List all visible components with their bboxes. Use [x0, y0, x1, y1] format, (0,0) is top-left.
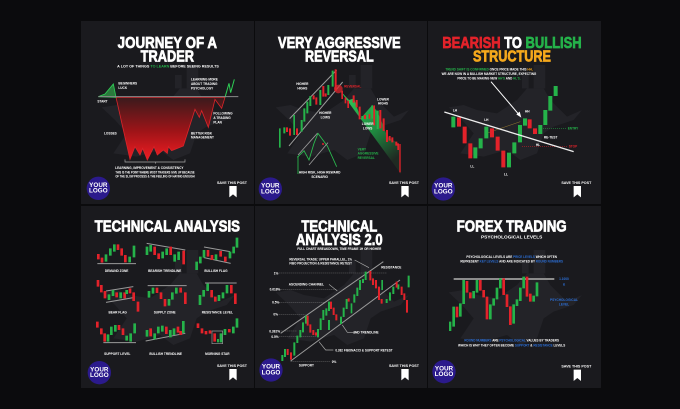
- labels: HIGH RISK, HIGH REWARD: [299, 171, 341, 175]
- logo: YOUR: [434, 183, 453, 190]
- description bottom: WHICH IS WHY THEY OFTEN BECOME SUPPORT & RESISTANCE LEVELS: [458, 343, 565, 347]
- logo: YOUR: [261, 183, 280, 190]
- caption: LEARNING, IMPROVEMENT & CONSISTENCY: [115, 166, 184, 170]
- logo: [88, 361, 111, 384]
- labels: HH: [525, 109, 530, 113]
- labels: SUPPORT: [299, 363, 314, 367]
- candles ascent: [279, 69, 337, 148]
- red candles: [457, 117, 537, 167]
- red candles: [287, 271, 408, 360]
- labels: HIGHS: [297, 86, 307, 90]
- pattern: support level: [96, 322, 136, 356]
- pattern: bullish trendline: [146, 321, 185, 356]
- panel: bearish to bullish structure: [428, 21, 601, 204]
- trendline: [444, 112, 574, 152]
- mini trade diagram: [297, 133, 337, 174]
- pattern: bear flag: BEAR FLAG: [108, 311, 127, 315]
- labels: HIGHER: [319, 111, 332, 115]
- arrow: [491, 82, 521, 118]
- labels: 0.382%: [269, 329, 280, 333]
- subtitle: FULL CHART BREAKDOWN, TIME FRAME 1H OR HIGHER: [297, 247, 382, 251]
- save this post: SAVE THIS POST: [561, 364, 592, 368]
- panel: technical analysis 2.0: [255, 206, 427, 388]
- logo: LOGO: [262, 369, 280, 376]
- labels: LOSSES: [104, 131, 117, 135]
- pattern: demand zone: [97, 244, 136, 273]
- save this post: [561, 181, 592, 197]
- save this post: SAVE THIS POST: [217, 364, 248, 368]
- logo: LOGO: [261, 188, 280, 195]
- labels: VERY: [358, 147, 367, 151]
- labels: LOWER: [362, 122, 374, 126]
- logo: YOUR: [89, 182, 108, 189]
- labels: 0%: [332, 360, 336, 364]
- bracket: [125, 159, 185, 164]
- labels: SCENARIO: [311, 175, 329, 179]
- save this post: [389, 181, 420, 197]
- subtitle: A LOT OF THINGS TO LEARN BEFORE SEEING RESULTS: [117, 64, 219, 68]
- logo: [87, 177, 110, 200]
- labels: FOLLOWING: [213, 112, 233, 116]
- right labels: [550, 277, 578, 306]
- panel: forex trading: [428, 206, 601, 388]
- description top: [460, 255, 563, 263]
- labels: START: [97, 99, 108, 103]
- description top: REPRESENT KEY LEVELS AND ARE INDICATED BY ROUND NUMBERS: [460, 259, 563, 263]
- logo: YOUR: [262, 364, 281, 371]
- logo: LOGO: [89, 188, 108, 195]
- labels: 0%: [273, 313, 278, 317]
- labels: ENTRY: [568, 127, 579, 131]
- description: [442, 68, 537, 80]
- heading: FOREX TRADING: [457, 219, 567, 236]
- heading: BEARISH TO BULLISH: [442, 35, 582, 52]
- labels: LH: [484, 118, 489, 122]
- pattern: bullish flag: BULLISH FLAG: [204, 269, 228, 273]
- description: PRICE TO BE MAKING NEW HH'S AND HL'S.: [457, 76, 521, 80]
- labels: LOWS: [363, 126, 372, 130]
- save this post: SAVE THIS POST: [389, 364, 420, 368]
- pattern: bullish flag: [195, 238, 238, 273]
- heading line 2: STRUCTURE: [473, 48, 551, 65]
- labels: 0.382 FIBONACCI & SUPPORT RETEST: [335, 348, 393, 352]
- green candles: [451, 86, 558, 167]
- pattern: supply zone: SUPPLY ZONE: [154, 311, 176, 315]
- heading line 2: ANALYSIS 2.0: [296, 232, 383, 249]
- labels: PSYCHOLOGY: [191, 86, 214, 90]
- labels: HIGHS: [378, 102, 388, 106]
- labels: FIBO PROJECTION & RESISTANCE RETEST: [289, 262, 352, 266]
- channel lines: [281, 262, 400, 361]
- heading: JOURNEY OF A: [118, 35, 217, 52]
- logo: LOGO: [90, 372, 109, 379]
- labels: LUCK: [118, 86, 128, 90]
- pattern: bear flag: [97, 280, 139, 315]
- green candles: [281, 272, 410, 361]
- logo: YOUR: [435, 365, 454, 372]
- logo: [259, 177, 282, 201]
- description: TREND SHIFT IS CONFIRMED ONCE PRICE MADE THIS HH,: [445, 68, 533, 72]
- reversal highlight: [334, 85, 343, 93]
- right labels: LEVEL: [559, 302, 569, 306]
- green reversal area: [340, 91, 401, 174]
- start baseline: [98, 95, 238, 98]
- labels: RE-TEST: [544, 136, 557, 140]
- labels: [269, 257, 401, 367]
- description bottom: [458, 338, 565, 347]
- description bottom: ROUND NUMBERS ARE PSYCHOLOGICAL VALUES BY TRADERS: [464, 338, 559, 342]
- labels: HIGHER: [296, 82, 309, 86]
- pattern: resistance level: [199, 283, 237, 315]
- save this post: SAVE THIS POST: [217, 181, 248, 185]
- logo: LOGO: [434, 188, 453, 195]
- annotation lines: [319, 260, 369, 350]
- heading line 2: REVERSAL: [305, 48, 374, 65]
- pattern: bullish trendline: BULLISH TRENDLINE: [149, 352, 182, 356]
- save this post: [389, 364, 420, 380]
- labels: [453, 109, 579, 177]
- pattern: bearish trendline: BEARISH TRENDLINE: [148, 269, 181, 273]
- labels: 0.618%: [270, 288, 281, 292]
- resistance level bar: [454, 276, 554, 282]
- labels: LH: [453, 109, 458, 113]
- pattern: bearish trendline: [146, 243, 185, 273]
- channel lines: [289, 70, 343, 146]
- logo: LOGO: [435, 371, 453, 378]
- labels: 2ND TRENDLINE: [353, 331, 379, 335]
- pattern: morning star: [197, 318, 238, 356]
- red candles: [456, 277, 532, 325]
- panel: technical analysis: [81, 206, 254, 388]
- heading line 2: TRADER: [141, 48, 194, 65]
- pattern: support level: SUPPORT LEVEL: [104, 352, 131, 356]
- labels: PLAN: [213, 120, 223, 124]
- labels: [97, 78, 233, 140]
- labels: ASCENDING CHANNEL: [289, 283, 324, 287]
- save this post: [217, 181, 248, 197]
- green candles: [449, 277, 538, 331]
- labels: LOWS: [321, 115, 330, 119]
- description top: PSYCHOLOGICAL LEVELS ARE PRICE LEVELS WHICH OFTEN: [466, 255, 558, 259]
- heading: TECHNICAL ANALYSIS: [95, 219, 240, 236]
- labels: [296, 82, 390, 179]
- pattern: resistance level: RESISTANCE LEVEL: [202, 311, 233, 315]
- labels: RESISTANCE: [381, 266, 401, 270]
- heading: VERY AGGRESSIVE: [278, 35, 401, 52]
- logo: YOUR: [90, 366, 109, 373]
- labels: REVERSAL: [344, 85, 361, 89]
- labels: LOWER: [377, 97, 390, 101]
- subtitle: PSYCHOLOGICAL LEVELS: [481, 234, 543, 240]
- caption: [115, 166, 195, 179]
- right labels: &: [563, 283, 566, 287]
- pattern: demand zone: DEMAND ZONE: [105, 269, 128, 273]
- pattern: morning star: MORNING STAR: [205, 352, 230, 356]
- save this post: SAVE THIS POST: [389, 181, 420, 185]
- level lines: [486, 122, 567, 147]
- logo: [432, 360, 456, 383]
- chart: red drawdown area: [116, 97, 225, 160]
- save this post: [217, 364, 248, 380]
- labels: LL: [470, 164, 474, 168]
- fibonacci levels: [277, 273, 387, 362]
- heading: TECHNICAL: [301, 219, 378, 236]
- labels: 0.5%: [272, 301, 279, 305]
- labels: A TRADING: [213, 116, 231, 120]
- labels: 0.5%: [271, 335, 279, 339]
- right labels: 1.1000: [559, 277, 569, 281]
- labels: STOP: [569, 145, 577, 149]
- chart: green end: [225, 79, 234, 97]
- labels: HL: [536, 143, 540, 147]
- labels: BETTER RISK: [191, 131, 213, 135]
- labels: REVERSAL: [358, 156, 375, 160]
- labels: 1%: [274, 271, 278, 275]
- caption: THIS IS THE POINT WHERE MOST TRADERS GIVE UP BECAUSE: [115, 170, 195, 174]
- labels: ABOUT TRADING: [191, 82, 218, 86]
- labels: REVERSAL TRADE: UPPER PARALLEL, 1%: [289, 257, 352, 261]
- labels: LEARNING MORE: [191, 78, 218, 82]
- candles descent: [341, 91, 401, 172]
- chart: green start: [98, 84, 116, 97]
- labels: AGGRESSIVE: [358, 152, 379, 156]
- labels: MANAGEMENT: [191, 136, 214, 140]
- save this post: [561, 364, 592, 381]
- panel: journey of a trader: [81, 21, 254, 204]
- caption: OF THE SLOW PROCESS & THE FEELING OF HAVING ENOUGH: [115, 175, 195, 179]
- pattern: supply zone: [148, 286, 187, 315]
- right labels: PSYCHOLOGICAL: [550, 298, 578, 302]
- description: WE ARE NOW IN A BULLISH MARKET STRUCTURE, EXPECTING: [442, 72, 537, 76]
- save this post: SAVE THIS POST: [561, 181, 592, 185]
- logo: [432, 177, 455, 201]
- panel: very aggressive reversal: [255, 21, 427, 204]
- labels: BEGINNERS: [118, 82, 137, 86]
- logo: [259, 358, 283, 382]
- labels: LL: [504, 173, 508, 177]
